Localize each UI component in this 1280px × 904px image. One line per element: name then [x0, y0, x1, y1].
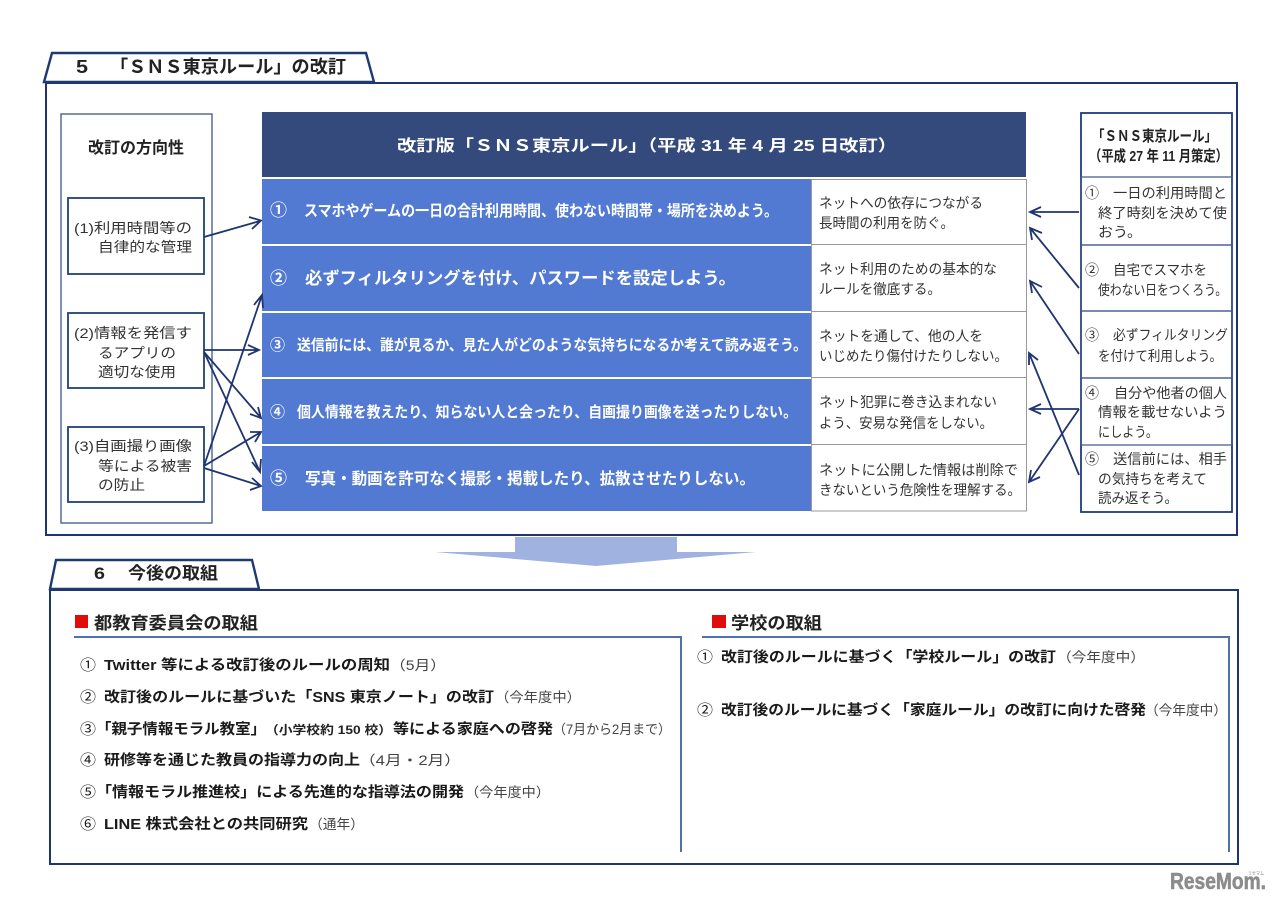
- heading tab: section 6: 今後の取組: [128, 563, 218, 583]
- item 6: [80, 816, 364, 833]
- item 3: 等による家庭への啓発: [393, 720, 554, 738]
- original rule 5: 送信前には、相手: [1113, 451, 1227, 467]
- item 4: （4月・2月）: [359, 753, 461, 768]
- box: direction 1: [68, 198, 204, 274]
- panel: revised rules table: [262, 112, 1026, 511]
- original rule 4: [1081, 378, 1232, 445]
- item 3: （7月から2月まで）: [553, 722, 671, 737]
- rule row 1: 長時間の利用を防ぐ。: [819, 215, 954, 231]
- item 6: （通年）: [309, 817, 364, 832]
- item 3: 「親子情報モラル教室」: [96, 720, 266, 738]
- rule row 3: 送信前には、誰が見るか、見た人がどのような気持ちになるか考えて読み返そう。: [297, 336, 807, 354]
- box: direction 2: [68, 313, 204, 388]
- heading: original rules: [1089, 127, 1228, 165]
- original rule 1: [1081, 177, 1232, 245]
- table header: [262, 112, 1026, 177]
- box: direction 3: 等による被害: [98, 458, 192, 474]
- original rule 2: ②: [1085, 262, 1099, 278]
- heading tab: section 5: [44, 53, 374, 82]
- item 4: 研修等を通じた教員の指導力の向上: [104, 751, 360, 769]
- item 1: （5月）: [390, 658, 446, 673]
- item 3: ③: [80, 721, 96, 738]
- original rule 2: 自宅でスマホを: [1113, 262, 1207, 278]
- item 3: （小学校約 150 校）: [265, 722, 392, 737]
- original rule 1: おう。: [1098, 224, 1142, 240]
- rule row 3: いじめたり傷付けたりしない。: [819, 348, 1008, 364]
- rule row 2: 必ずフィルタリングを付け、パスワードを設定しよう。: [305, 268, 736, 288]
- original rule 5: ⑤: [1085, 451, 1099, 467]
- panel: section 6 frame: [50, 590, 1238, 864]
- rule row 4: ④: [270, 404, 285, 421]
- original rule 3: [1081, 311, 1232, 378]
- panel: original 2015 rules: [1081, 113, 1232, 512]
- rule row 1: スマホやゲームの一日の合計利用時間、使わない時間帯・場所を決めよう。: [304, 201, 778, 220]
- heading tab: section 5: 5: [76, 57, 88, 77]
- original rule 3: を付けて利用しよう。: [1098, 348, 1222, 364]
- original rule 1: ①: [1085, 185, 1099, 201]
- item 2: ②: [80, 689, 96, 706]
- original rule 1: 終了時刻を決めて使: [1098, 205, 1227, 221]
- item 1: Twitter 等による改訂後のルールの周知: [104, 656, 390, 674]
- item 4: ④: [80, 752, 96, 769]
- arrows: original rules to revised rules: [1029, 207, 1079, 482]
- panel: section 5 frame: [46, 83, 1237, 535]
- school item 2: （今年度中）: [1145, 703, 1227, 718]
- original rule 5: 読み返そう。: [1098, 490, 1178, 506]
- item 5: [80, 783, 550, 801]
- box: direction 3: の防止: [98, 477, 145, 493]
- rule row 5: 写真・動画を許可なく撮影・掲載したり、拡散させたりしない。: [305, 469, 755, 488]
- rule row 4: [262, 378, 1026, 444]
- box: direction 2: 適切な使用: [98, 364, 176, 380]
- rule row 2: ②: [270, 269, 287, 288]
- original rule 3: ③: [1085, 327, 1099, 343]
- heading tab: section 5: 「ＳＮＳ東京ルール」の改訂: [110, 57, 346, 77]
- item 5: ⑤: [80, 784, 96, 801]
- item 1: ①: [80, 657, 96, 674]
- rule row 1: [262, 179, 1026, 244]
- item 5: 「情報モラル推進校」による先進的な指導法の開発: [96, 783, 465, 801]
- item 1: [80, 656, 446, 674]
- heading: school: 学校の取組: [731, 613, 822, 633]
- heading: board of education: 都教育委員会の取組: [94, 614, 258, 633]
- rule row 2: ネット利用のための基本的な: [819, 261, 997, 277]
- box: direction 3: (3)自画撮り画像: [74, 438, 192, 454]
- rule row 3: ③: [270, 337, 285, 354]
- rule row 4: よう、安易な発信をしない。: [819, 415, 993, 431]
- original rule 2: [1081, 245, 1232, 311]
- rule row 4: 個人情報を教えたり、知らない人と会ったり、自画撮り画像を送ったりしない。: [297, 403, 797, 421]
- school item 1: 改訂後のルールに基づく「学校ルール」の改訂: [721, 648, 1057, 666]
- original rule 4: ④: [1085, 385, 1099, 401]
- table header: 改訂版「ＳＮＳ東京ルール」（平成 31 年 4 月 25 日改訂）: [397, 136, 897, 155]
- box: direction 2: るアプリの: [98, 345, 176, 361]
- original rule 2: 使わない日をつくろう。: [1098, 282, 1227, 298]
- school item 1: ①: [697, 649, 713, 666]
- rule row 5: きないという危険性を理解する。: [819, 482, 1021, 498]
- rule row 1: ネットへの依存につながる: [819, 195, 983, 211]
- box: direction 3: [68, 427, 204, 502]
- panel: revision direction: [61, 114, 212, 523]
- box: direction 2: (2)情報を発信す: [74, 325, 192, 341]
- item 5: （今年度中）: [465, 785, 550, 800]
- rule row 2: [262, 244, 1026, 312]
- arrows: direction to revised rules: [204, 217, 263, 490]
- rule row 3: ネットを通して、他の人を: [819, 328, 983, 344]
- heading tab: section 6: [50, 560, 259, 589]
- item 6: ⑥: [80, 816, 96, 833]
- rule row 2: ルールを徹底する。: [819, 281, 941, 297]
- panel: school initiatives: [697, 613, 1229, 852]
- original rule 5: [1085, 451, 1227, 506]
- heading tab: section 6: 6: [94, 564, 105, 583]
- box: direction 1: 自律的な管理: [98, 239, 192, 255]
- rule row 5: ⑤: [270, 469, 287, 488]
- item 6: LINE 株式会社との共同研究: [104, 816, 309, 833]
- original rule 4: 自分や他者の個人: [1114, 385, 1227, 401]
- heading: revision direction: 改訂の方向性: [88, 138, 184, 157]
- original rule 4: 情報を載せないよう: [1098, 404, 1227, 420]
- rule row 4: ネット犯罪に巻き込まれない: [819, 394, 997, 410]
- item 2: （今年度中）: [495, 690, 581, 705]
- item 2: 改訂後のルールに基づいた「SNS 東京ノート」の改訂: [104, 688, 495, 706]
- heading: original rules: （平成 27 年 11 月策定）: [1089, 147, 1228, 165]
- rule row 5: [262, 444, 1026, 511]
- panel: board of education initiatives: [74, 614, 681, 852]
- rule row 5: ネットに公開した情報は削除で: [819, 462, 1018, 478]
- item 4: [80, 751, 461, 769]
- rule row 3: [262, 312, 1026, 378]
- original rule 5: の気持ちを考えて: [1098, 471, 1207, 487]
- rule row 1: ①: [270, 201, 287, 220]
- school item 2: [697, 701, 1227, 719]
- item 3: [80, 720, 671, 738]
- heading: original rules: 「ＳＮＳ東京ルール」: [1092, 127, 1217, 145]
- item 2: [80, 688, 581, 706]
- box: direction 1: (1)利用時間等の: [74, 220, 192, 236]
- logo: ReseMom watermark: リセマム: [1248, 871, 1264, 877]
- arrow: down to section 6: [435, 537, 756, 566]
- school item 1: （今年度中）: [1057, 650, 1145, 665]
- school item 2: 改訂後のルールに基づく「家庭ルール」の改訂に向けた啓発: [721, 701, 1147, 719]
- school item 2: ②: [697, 702, 713, 719]
- original rule 3: 必ずフィルタリング: [1113, 327, 1228, 343]
- original rule 1: 一日の利用時間と: [1113, 185, 1227, 201]
- original rule 4: にしよう。: [1098, 424, 1158, 440]
- school item 1: [697, 648, 1145, 666]
